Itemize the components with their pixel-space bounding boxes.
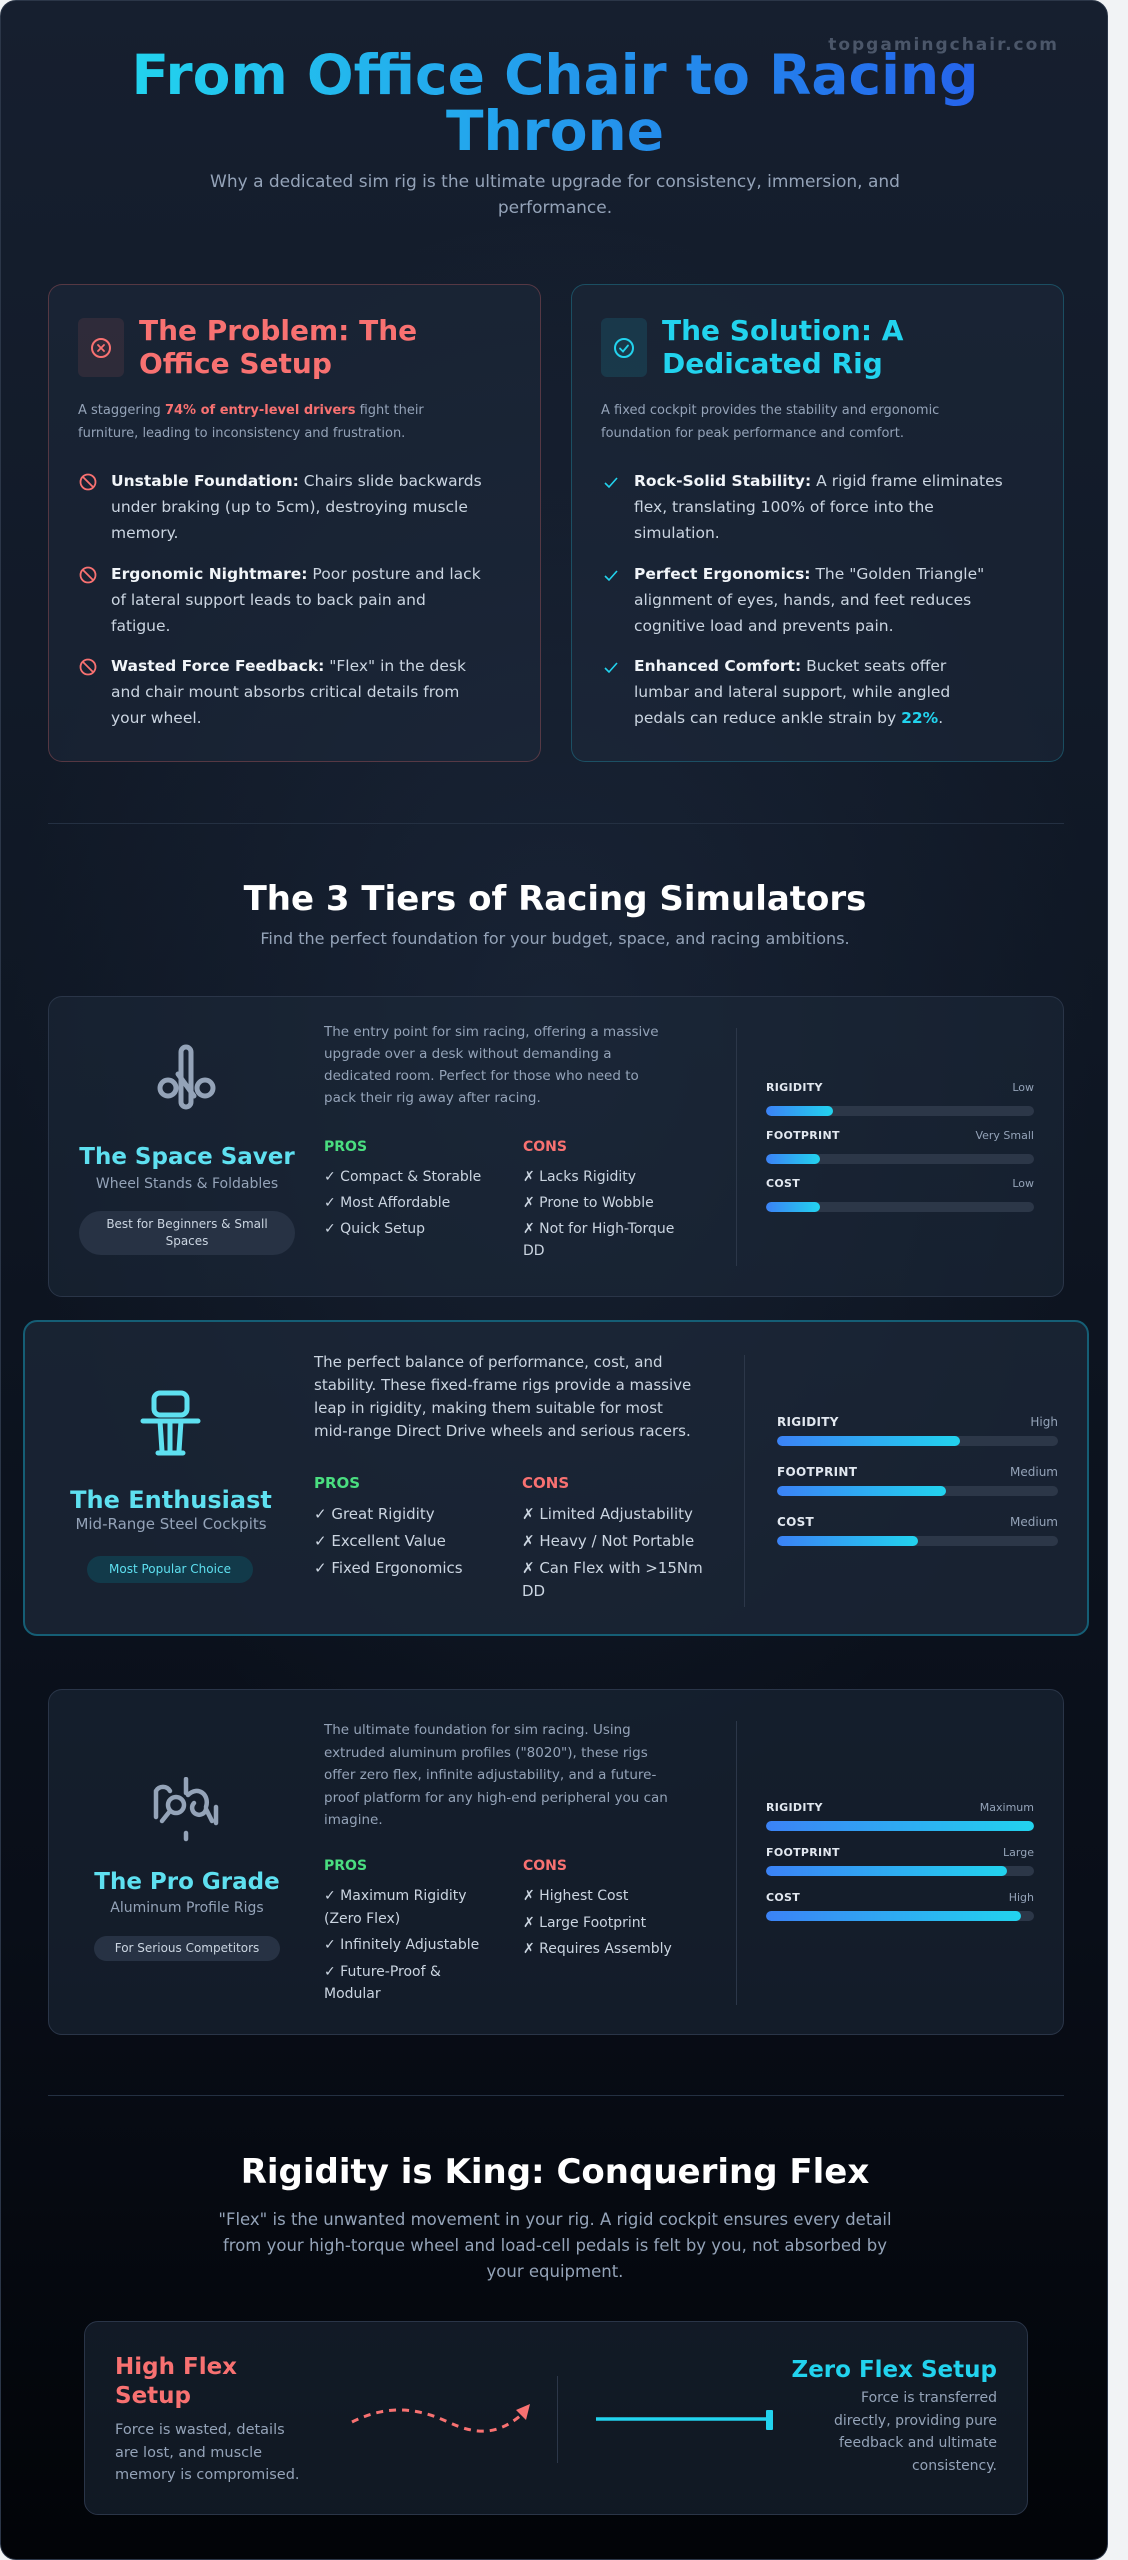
pros: ✓ Great Rigidity	[314, 1505, 435, 1523]
title: The Enthusiast	[70, 1486, 272, 1514]
cons: ✗ Heavy / Not Portable	[522, 1532, 694, 1550]
description: pack their rig away after racing.	[324, 1090, 541, 1106]
badge	[79, 1211, 295, 1255]
cons: DD	[523, 1243, 545, 1259]
bar chart: COST	[777, 1515, 814, 1529]
cons	[523, 1139, 674, 1259]
title: The Pro Grade	[94, 1869, 280, 1895]
solution list: flex, translating 100% of force into the	[634, 498, 934, 516]
cons: ✗ Large Footprint	[523, 1914, 646, 1930]
pros: ✓ Fixed Ergonomics	[314, 1559, 463, 1577]
bar chart: FOOTPRINT	[766, 1846, 840, 1859]
panel: flex comparison	[84, 2321, 1028, 2515]
description: proof platform for any high-end peripheral you can	[324, 1790, 668, 1806]
panel: tier 1 space saver	[48, 996, 1064, 1297]
bar chart: Large	[1003, 1846, 1034, 1859]
problem list: Unstable Foundation: Chairs slide backwards	[111, 472, 482, 490]
bar chart: RIGIDITY	[766, 1081, 823, 1094]
description: upgrade over a desk without demanding a	[324, 1046, 612, 1062]
cons: ✗ Requires Assembly	[523, 1941, 672, 1957]
bar chart: Low	[1012, 1177, 1034, 1190]
bar chart: Low	[1012, 1081, 1034, 1094]
icon: aluminum profile rig	[154, 1777, 218, 1842]
bar chart: RIGIDITY	[777, 1415, 839, 1429]
cons: ✗ Prone to Wobble	[523, 1195, 654, 1211]
cons: ✗ Not for High-Torque	[523, 1221, 674, 1237]
solution list: Rock-Solid Stability: A rigid frame eliminates	[634, 472, 1003, 490]
title: The Space Saver	[79, 1144, 295, 1170]
tiers subtitle: Find the perfect foundation for your budget, space, and racing ambitions.	[260, 929, 850, 948]
heading: rigidity is king: Rigidity is King: Conquering Flex	[241, 2152, 869, 2192]
bar chart: Medium	[1010, 1465, 1058, 1479]
bar chart	[777, 1415, 1058, 1546]
icon: wheel stand	[158, 1044, 216, 1110]
cons: CONS	[522, 1474, 569, 1492]
panel: tier 2 enthusiast	[23, 1320, 1089, 1636]
subtitle: Aluminum Profile Rigs	[110, 1900, 264, 1916]
badge: Best for Beginners & Small Spaces	[106, 1217, 268, 1248]
problem list: Wasted Force Feedback: "Flex" in the desk	[111, 657, 466, 675]
zero flex text: Zero Flex Setup	[792, 2357, 997, 2383]
badge	[94, 1936, 280, 1961]
icon: seat	[140, 1390, 200, 1456]
description	[324, 1722, 668, 1828]
rigidity subtitle: "Flex" is the unwanted movement in your rig. A rigid cockpit ensures every detail from your high-torque wheel and load-cell pedals is felt by you, not absorbed by your equipment.	[218, 2210, 892, 2281]
problem list: under braking (up to 5cm), destroying muscle	[111, 498, 468, 516]
solution list: alignment of eyes, hands, and feet reduces	[634, 590, 971, 608]
cons: CONS	[523, 1858, 567, 1874]
cons: CONS	[523, 1139, 567, 1155]
description	[324, 1024, 659, 1106]
problem list: fatigue.	[111, 616, 170, 634]
solution list: lumbar and lateral support, while angled	[634, 683, 950, 701]
cons	[523, 1858, 672, 1957]
bar chart: FOOTPRINT	[766, 1129, 840, 1142]
cons	[522, 1474, 703, 1600]
cons: DD	[522, 1582, 545, 1600]
badge: For Serious Competitors	[115, 1941, 259, 1955]
problem list: your wheel.	[111, 709, 202, 727]
heading: 3 tiers: The 3 Tiers of Racing Simulators	[244, 879, 866, 919]
title: From Office Chair to Racing Throne	[132, 43, 978, 163]
problem list	[80, 472, 482, 727]
description: leap in rigidity, making them suitable for most	[314, 1399, 663, 1417]
pros: ✓ Compact & Storable	[324, 1169, 481, 1185]
bar chart: Very Small	[975, 1129, 1034, 1142]
solution list: Perfect Ergonomics: The "Golden Triangle"	[634, 564, 984, 582]
arrow: solid	[596, 2410, 773, 2430]
description	[314, 1353, 691, 1440]
description: stability. These fixed-frame rigs provide a massive	[314, 1376, 691, 1394]
zero flex text: Force is transferred directly, providing pure feedback and ultimate consistency.	[834, 2390, 997, 2474]
high flex text	[115, 2354, 300, 2483]
subtitle: Wheel Stands & Foldables	[96, 1176, 278, 1192]
pros: ✓ Maximum Rigidity	[324, 1888, 467, 1904]
pros: ✓ Excellent Value	[314, 1532, 446, 1550]
bar chart: COST	[766, 1891, 800, 1904]
pros	[324, 1858, 479, 2002]
pros	[324, 1139, 481, 1237]
bar chart: High	[1009, 1891, 1034, 1904]
pros: PROS	[324, 1858, 367, 1874]
pros: ✓ Future-Proof &	[324, 1964, 441, 1980]
description: The perfect balance of performance, cost, and	[314, 1353, 663, 1371]
description: The entry point for sim racing, offering a massive	[324, 1024, 659, 1040]
bar chart	[766, 1081, 1034, 1212]
subtitle: Why a dedicated sim rig is the ultimate upgrade for consistency, immersion, and performance.	[210, 172, 900, 218]
panel: the solution	[571, 284, 1064, 762]
high flex text: Force is wasted, details are lost, and muscle memory is compromised.	[115, 2422, 300, 2483]
problem list: and chair mount absorbs critical details from	[111, 683, 459, 701]
panel: tier 3 pro grade	[48, 1689, 1064, 2035]
description: imagine.	[324, 1812, 383, 1828]
cons: ✗ Highest Cost	[523, 1888, 628, 1904]
badge: Most Popular Choice	[109, 1562, 231, 1576]
intro text: A fixed cockpit provides the stability and ergonomic foundation for peak performance and comfort.	[601, 403, 939, 441]
arrow: dashed wavy	[351, 2404, 530, 2433]
bar chart: High	[1030, 1415, 1058, 1429]
bar chart: RIGIDITY	[766, 1801, 823, 1814]
bar chart: COST	[766, 1177, 800, 1190]
pros	[314, 1474, 463, 1577]
pros: ✓ Quick Setup	[324, 1221, 425, 1237]
bar chart: FOOTPRINT	[777, 1465, 857, 1479]
problem list: memory.	[111, 524, 178, 542]
solution list: cognitive load and prevents pain.	[634, 616, 894, 634]
pros: PROS	[324, 1139, 367, 1155]
cons: ✗ Limited Adjustability	[522, 1505, 693, 1523]
pros: PROS	[314, 1474, 360, 1492]
cons: ✗ Lacks Rigidity	[523, 1169, 636, 1185]
description: offer zero flex, infinite adjustability, and a future-	[324, 1767, 656, 1783]
description: dedicated room. Perfect for those who need to	[324, 1068, 639, 1084]
bar chart: Medium	[1010, 1515, 1058, 1529]
problem list: of lateral support leads to back pain and	[111, 590, 426, 608]
icon: check circle	[601, 318, 647, 377]
description: The ultimate foundation for sim racing. Using	[324, 1722, 631, 1738]
solution list	[604, 472, 1003, 727]
intro text: A staggering 74% of entry-level drivers fight their furniture, leading to inconsistency and frustration.	[78, 403, 424, 441]
subtitle: Mid-Range Steel Cockpits	[75, 1515, 267, 1533]
description: mid-range Direct Drive wheels and serious racers.	[314, 1422, 691, 1440]
pros: Modular	[324, 1986, 381, 2002]
pros: ✓ Infinitely Adjustable	[324, 1937, 479, 1953]
pros: ✓ Most Affordable	[324, 1195, 450, 1211]
solution list: pedals can reduce ankle strain by 22%.	[634, 709, 943, 727]
problem list: Ergonomic Nightmare: Poor posture and lack	[111, 564, 481, 582]
icon: x circle	[78, 318, 124, 377]
bar chart	[766, 1801, 1034, 1921]
panel: the problem	[48, 284, 541, 762]
cons: ✗ Can Flex with >15Nm	[522, 1559, 703, 1577]
heading: problem: The Problem: The Office Setup	[139, 314, 417, 380]
pros: (Zero Flex)	[324, 1910, 400, 1926]
zero flex text	[792, 2357, 997, 2474]
solution list: simulation.	[634, 524, 720, 542]
badge	[87, 1556, 253, 1583]
high flex text: High Flex Setup	[115, 2354, 237, 2409]
solution list: Enhanced Comfort: Bucket seats offer	[634, 657, 946, 675]
bar chart: Maximum	[980, 1801, 1034, 1814]
description: extruded aluminum profiles ("8020"), these rigs	[324, 1744, 648, 1760]
watermark: topgamingchair.com	[828, 35, 1059, 55]
heading: solution: The Solution: A Dedicated Rig	[662, 314, 903, 380]
